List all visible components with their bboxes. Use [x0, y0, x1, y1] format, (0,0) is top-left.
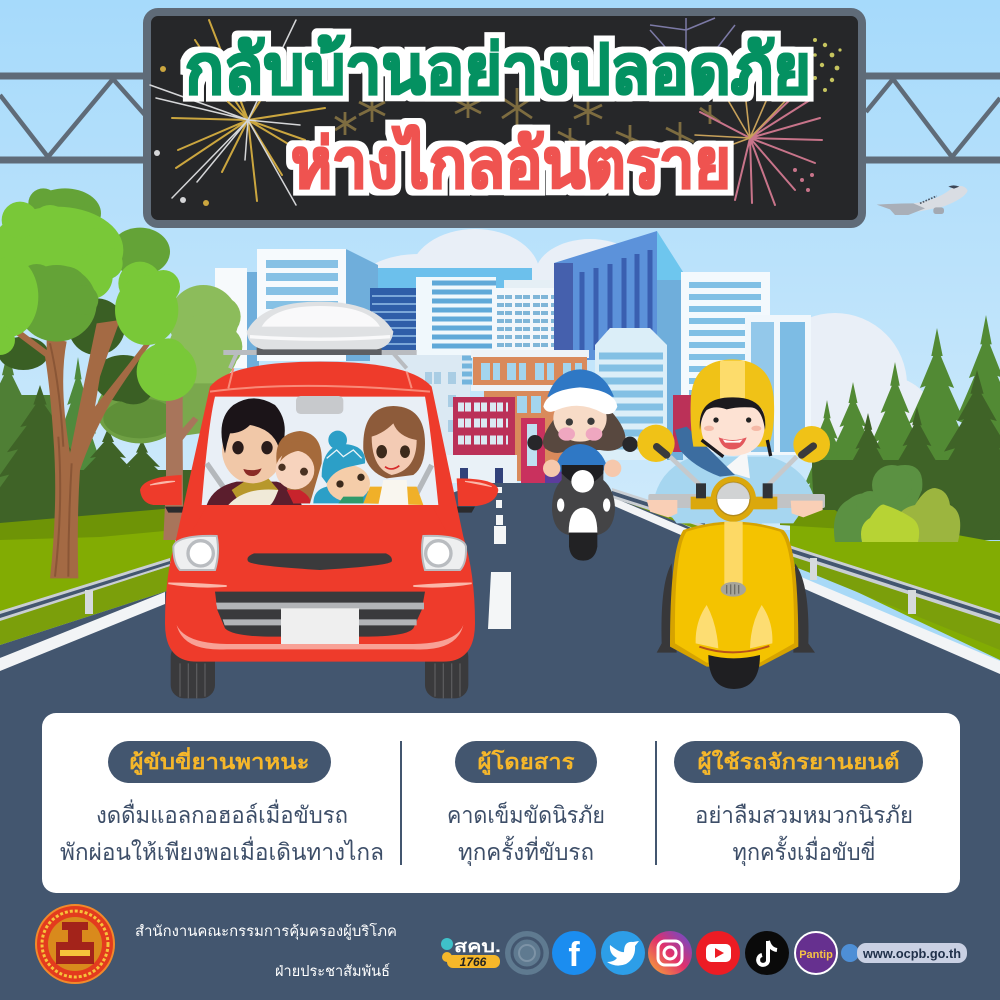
- website pill: [841, 943, 967, 963]
- tire: [708, 655, 760, 689]
- agency seal: [36, 905, 114, 983]
- passengers: [207, 398, 425, 505]
- girl body: [557, 444, 606, 472]
- building: cyan tower: [416, 277, 496, 357]
- red family car: [140, 302, 498, 698]
- icon: youtube: [696, 931, 740, 975]
- center stripe: [724, 522, 743, 590]
- airplane: [877, 185, 968, 215]
- rear canopy lobes: [28, 188, 170, 276]
- girl face: [553, 395, 607, 442]
- passenger text: ทุกครั้งที่ขับรถ: [458, 836, 594, 866]
- rear view mirror: [296, 396, 343, 414]
- son: [313, 431, 372, 503]
- OCPB 1766 logo: [441, 937, 501, 969]
- building: pale back block: [377, 268, 532, 358]
- driver text: พักผ่อนให้เพียงพอเมื่อเดินทางไกล: [60, 836, 384, 865]
- girl hat: [547, 369, 614, 400]
- gantry left truss: [0, 76, 150, 160]
- handlebars: [647, 483, 825, 517]
- left road edge and guardrail: [0, 558, 170, 671]
- leg shield highlights: [696, 605, 772, 648]
- firework: gold left: [150, 20, 325, 206]
- driver: [207, 398, 302, 505]
- driver text: [60, 799, 384, 865]
- left background forest: [0, 350, 230, 530]
- mirrors: [637, 425, 675, 462]
- small scooter with girl: [527, 369, 638, 561]
- canopy shadow: [0, 298, 153, 404]
- street level: [447, 455, 600, 483]
- building: crimson: [453, 397, 515, 455]
- building: left white: [215, 268, 259, 368]
- driver text: งดดื่มแอลกอฮอล์เมื่อขับรถ: [96, 799, 348, 828]
- OCPB 1766 logo: สคบ.: [454, 937, 501, 956]
- scooter body: [670, 522, 798, 667]
- icon: pantip: [795, 932, 837, 974]
- side bright canopy lobes: [0, 257, 197, 401]
- motorcycle text: ทุกครั้งเมื่อขับขี่: [732, 836, 876, 866]
- windshield: [202, 397, 438, 505]
- building: large blue: [554, 231, 685, 360]
- building: crimson right: [673, 395, 695, 452]
- building: dark blue: [370, 288, 432, 358]
- white information panel: [42, 713, 960, 893]
- motorcycle heading pill: ผู้ใช้รถจักรยานยนต์: [698, 749, 900, 776]
- mirrors: [140, 475, 498, 506]
- firework: dotted yellow: [813, 38, 842, 92]
- fender highlights: [168, 583, 472, 587]
- passenger text: [447, 800, 605, 866]
- helmet: [691, 359, 774, 447]
- rider face: [701, 399, 765, 456]
- legs and shoes: [657, 563, 815, 653]
- right pine forest: [794, 315, 1000, 541]
- tire: [569, 533, 597, 561]
- trunk: [12, 320, 153, 578]
- clouds behind city: [360, 229, 930, 457]
- lower grille: [215, 592, 425, 637]
- road: [0, 483, 1000, 1000]
- gold snowflakes: [335, 88, 720, 150]
- yellow scooter with rider: [637, 359, 830, 689]
- background olive trees: [97, 285, 242, 443]
- tires: [171, 643, 468, 698]
- large left tree: [0, 188, 198, 578]
- building: tall white blue: [257, 249, 378, 361]
- driver heading pill: [108, 741, 331, 783]
- scarf strap: [675, 427, 735, 477]
- building: right low blue: [745, 315, 811, 455]
- driver heading pill: ผู้ขับขี่ยานพาหนะ: [130, 746, 310, 776]
- right grass: [780, 510, 1000, 660]
- icon: facebook: [552, 931, 596, 975]
- building: orange mid: [471, 350, 589, 481]
- mother: [363, 406, 425, 505]
- helmet straps: [702, 440, 771, 457]
- motorcycle heading pill: [674, 741, 923, 783]
- icon: pantip: Pantip: [799, 949, 833, 961]
- social icons: [505, 931, 837, 975]
- building: pink corner: [521, 418, 545, 483]
- car body: [165, 362, 475, 662]
- hood: [190, 505, 448, 535]
- headlamp: [711, 476, 756, 522]
- motorcycle text: อย่าลืมสวมหมวกนิรภัย: [695, 802, 913, 828]
- scooter body: [552, 465, 615, 535]
- city skyline: [215, 231, 811, 483]
- OCPB 1766 logo: 1766: [460, 955, 487, 969]
- passenger heading pill: [455, 741, 597, 783]
- motorcycle text: [695, 802, 913, 866]
- red trim: [699, 646, 769, 652]
- passenger text: คาดเข็มขัดนิรภัย: [447, 800, 605, 828]
- building: pale blue right: [595, 328, 667, 460]
- firework: violet top: [650, 18, 735, 75]
- icon: ocpb gray: [505, 931, 549, 975]
- icon: tiktok: [745, 931, 789, 975]
- right bushes: [834, 465, 960, 542]
- icon: twitter: [601, 931, 645, 975]
- headlights: [173, 536, 466, 570]
- building: white windows: [492, 280, 562, 354]
- footer agency text: [135, 922, 397, 980]
- website pill: www.ocpb.go.th: [862, 947, 961, 961]
- mirrors: [527, 435, 543, 450]
- gantry right truss: [860, 76, 1000, 160]
- left grass: [0, 508, 175, 620]
- seat belts: [207, 463, 432, 503]
- firework: rose right: [690, 92, 822, 205]
- sky background: [0, 0, 1000, 530]
- bright canopy lobes: [0, 202, 123, 299]
- small tree trunk: [163, 393, 198, 540]
- jacket: [655, 457, 813, 523]
- footer agency text: สำนักงานคณะกรรมการคุ้มครองผู้บริโภค: [135, 922, 397, 940]
- road lane dashes: [488, 487, 511, 629]
- building: right white blue: [657, 272, 770, 460]
- title line 2: ห่างไกลอันตราย: [291, 124, 731, 202]
- icon: instagram: [648, 931, 692, 975]
- hands: [543, 460, 560, 477]
- right road edge and guardrail: [612, 488, 1000, 674]
- title line 1: กลับบ้านอย่างปลอดภัย: [185, 32, 811, 108]
- overhead sign: [147, 12, 862, 224]
- building: pale left fill: [370, 355, 472, 483]
- passenger heading pill: ผู้โดยสาร: [478, 749, 575, 776]
- upper grille slot: [247, 553, 392, 570]
- girl hair: [543, 410, 626, 453]
- roof box: [223, 302, 417, 368]
- middle dark canopy lobes: [17, 264, 98, 342]
- footer agency text: ฝ่ายประชาสัมพันธ์: [275, 963, 390, 980]
- sign frame: [147, 12, 862, 224]
- vent: [721, 582, 746, 597]
- icon: facebook: f: [568, 936, 580, 974]
- daughter: [276, 431, 322, 503]
- bumper highlight: [177, 625, 463, 650]
- number plate: [281, 608, 359, 645]
